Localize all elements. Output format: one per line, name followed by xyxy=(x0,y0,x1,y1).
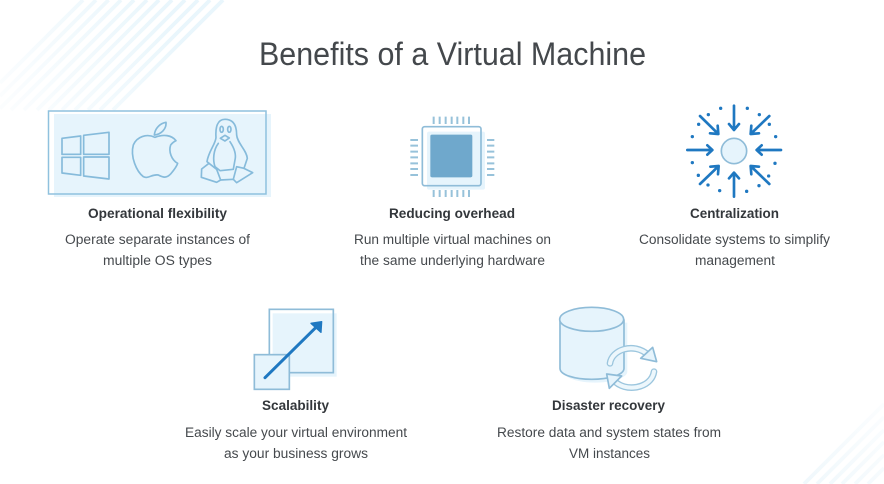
icon: arrows converging on a circle xyxy=(687,106,781,197)
text: disaster recovery description xyxy=(497,425,721,461)
text: reducing overhead description xyxy=(354,232,551,268)
text: disaster recovery description: Restore data and system states from xyxy=(497,425,721,440)
background stripes top left xyxy=(0,0,223,110)
heading: operational flexibility: Operational flexibility xyxy=(88,206,227,221)
text: centralization description xyxy=(639,232,830,268)
text: scalability description: Easily scale your virtual environment xyxy=(185,425,407,440)
text: centralization description: Consolidate systems to simplify xyxy=(639,232,830,247)
heading: scalability: Scalability xyxy=(262,398,329,413)
text: operational flexibility description xyxy=(65,232,250,268)
panel: centralization xyxy=(639,106,830,268)
text: scalability description xyxy=(185,425,407,461)
text: operational flexibility description: multiple OS types xyxy=(103,253,212,268)
heading: reducing overhead: Reducing overhead xyxy=(389,206,515,221)
panel: operational flexibility xyxy=(48,111,271,268)
icon: apple logo xyxy=(132,122,178,177)
panel: disaster recovery xyxy=(497,307,721,461)
background stripes bottom right xyxy=(804,404,884,484)
text: reducing overhead description: the same underlying hardware xyxy=(360,253,545,268)
title: Benefits of a Virtual Machine xyxy=(259,36,646,72)
icon: linux penguin xyxy=(201,119,253,183)
panel: reducing overhead xyxy=(354,117,551,268)
icon: cpu chip xyxy=(410,117,494,197)
icon: windows logo xyxy=(62,132,109,179)
icon: database with recovery arrows xyxy=(560,307,657,388)
text: centralization description: management xyxy=(695,253,775,268)
text: operational flexibility description: Operate separate instances of xyxy=(65,232,250,247)
text: reducing overhead description: Run multiple virtual machines on xyxy=(354,232,551,247)
heading: centralization: Centralization xyxy=(690,206,779,221)
icon: small square scaling to large square xyxy=(254,309,337,389)
text: scalability description: as your business grows xyxy=(224,446,368,461)
icon: operating systems box xyxy=(48,111,271,197)
heading: disaster recovery: Disaster recovery xyxy=(552,398,665,413)
text: disaster recovery description: VM instances xyxy=(569,446,650,461)
panel: scalability xyxy=(185,309,407,461)
